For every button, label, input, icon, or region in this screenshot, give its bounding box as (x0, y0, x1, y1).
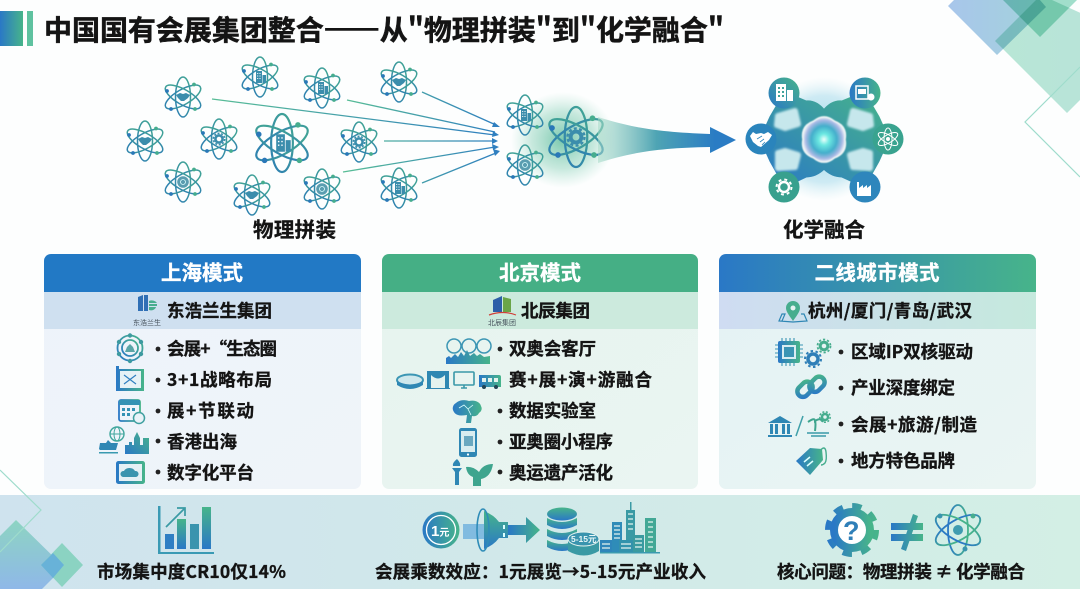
diagram: physical assembly atoms (124, 57, 420, 215)
atom (931, 505, 985, 555)
node: factory (850, 172, 880, 202)
bottom band (0, 470, 1080, 589)
icon: multiplier flow (422, 502, 660, 556)
list item: sports expo show tour fusion: 赛+展+演+游融合 (509, 367, 652, 392)
atom: ship (378, 62, 420, 102)
atom: handshake upper (162, 77, 204, 117)
list item: industry binding: 产业深度绑定 (851, 375, 955, 400)
list item: double Olympic: 双奥会客厅 (509, 336, 596, 361)
atom: upper small (504, 95, 546, 135)
node: handshake (746, 124, 776, 154)
list item: Olympic legacy (452, 459, 613, 486)
atom: bank (301, 68, 343, 108)
list item: Olympic legacy: 奥运遗产活化 (509, 460, 613, 485)
company name: 北辰集团 (521, 298, 590, 323)
icon: Donghao Lansheng logo: 东浩兰生 (133, 318, 161, 328)
label: physical assembly: 物理拼装 (253, 213, 336, 243)
coin 1 yuan (422, 512, 460, 548)
list item: data lab: 数据实验室 (509, 398, 596, 423)
molecule body (761, 93, 888, 186)
skyline (600, 502, 660, 554)
list item: Hong Kong going overseas (99, 427, 238, 454)
caption: market concentration: 市场集中度CR10仅14% (97, 559, 286, 584)
panel body (719, 254, 1036, 489)
list item: industry binding (795, 374, 955, 400)
list item: IP dual core (775, 338, 973, 367)
list item: double Olympic (446, 336, 596, 364)
sub band (44, 292, 361, 329)
node: atom (872, 124, 904, 154)
label: chemical fusion: 化学融合 (783, 213, 866, 243)
node: building (768, 78, 800, 108)
gear question: ? (843, 516, 860, 546)
list item: sports expo show tour fusion (397, 367, 652, 392)
list item: data lab (453, 398, 596, 423)
icon: Beijing North Star logo (488, 296, 516, 328)
node: exhibition (850, 78, 880, 108)
list item: digital platform: 数字化平台 (167, 460, 254, 485)
icon: Donghao Lansheng logo (133, 295, 161, 328)
merged atoms with glow (504, 92, 615, 188)
atom: robot (301, 169, 343, 209)
list item: local brands (796, 448, 955, 475)
atom: lower small (504, 145, 546, 185)
list item: strategy: 3+1战略布局 (167, 367, 272, 392)
input bar (463, 524, 488, 539)
list item: expo + tourism/manufacturing (768, 412, 978, 437)
output arrow (508, 517, 540, 543)
panel heading: 北京模式 (499, 256, 581, 286)
panel heading: 上海模式 (161, 256, 243, 286)
atom: gear (198, 119, 240, 159)
light holes (777, 111, 871, 168)
list item: exhibition and festival: 展+节联动 (167, 398, 254, 423)
list item: IP dual core: 区域IP双核驱动 (851, 339, 973, 364)
list item: Hong Kong going overseas: 香港出海 (167, 429, 238, 454)
atom: lower left (162, 162, 204, 202)
atom: large building (251, 114, 313, 172)
company name: 东浩兰生集团 (167, 298, 272, 323)
big arrow (598, 117, 736, 163)
title: 中国国有会展集团整合——从"物理拼装"到"化学融合" (44, 9, 724, 49)
icon: Beijing North Star logo: 北辰集团 (488, 318, 516, 328)
panel body (44, 254, 361, 489)
list item: ecosystem: 会展+“生态圈 (167, 336, 277, 361)
atom: large (544, 107, 608, 167)
panel: Beijing model (382, 254, 698, 489)
list item: exhibition and festival (119, 398, 254, 424)
panel: second-tier cities (719, 254, 1036, 489)
caption: core problem: 核心问题：物理拼装 ≠ 化学融合 (777, 559, 1026, 584)
decoration: top-right diamonds (948, 0, 1080, 177)
green glow (511, 92, 615, 188)
converging arrows (212, 92, 500, 183)
icon: map pin (779, 301, 807, 322)
molecule glow (762, 77, 886, 201)
title marker bars (0, 11, 33, 46)
coin 5-15 yuan: 5-15元 (571, 534, 597, 544)
panel header (382, 254, 698, 292)
list item: expo + tourism/manufacturing: 会展+旅游/制造 (851, 412, 978, 437)
panel heading: 二线城市模式 (814, 256, 940, 286)
panel header (44, 254, 361, 292)
list item: mini program: 亚奥圈小程序 (509, 429, 613, 454)
panel header (719, 254, 1036, 292)
atom: building top (239, 57, 281, 97)
gear question (828, 506, 876, 554)
list item: mini program (459, 428, 613, 457)
panel body (382, 254, 698, 489)
list item: digital platform (116, 460, 254, 485)
funnel (484, 511, 508, 549)
caption: multiplier effect: 会展乘数效应：1元展览→5-15元产业收入 (375, 559, 706, 584)
sub band (382, 292, 698, 329)
atom: factory (231, 175, 273, 215)
molecule (746, 77, 904, 202)
not equal (891, 514, 923, 551)
list item: local brands: 地方特色品牌 (851, 448, 955, 473)
glowing core (803, 117, 845, 162)
sub band (719, 292, 1036, 329)
coin 1 yuan: 1元 (431, 523, 449, 540)
atom: handshake left (124, 121, 166, 161)
coin stacks (547, 508, 577, 551)
cities: 杭州/厦门/青岛/武汉 (808, 298, 972, 323)
icon: gear not equal atom (828, 505, 985, 555)
node: gear (768, 172, 800, 202)
atom: brain (338, 122, 380, 162)
decoration: bottom-left diamonds (0, 470, 83, 589)
list item: strategy (116, 366, 272, 392)
icon: bar chart (158, 506, 214, 554)
coin 5-15 yuan (568, 532, 599, 556)
atom: calendar (378, 168, 420, 208)
panel: Shanghai model (44, 254, 361, 489)
list item: ecosystem (117, 333, 277, 363)
